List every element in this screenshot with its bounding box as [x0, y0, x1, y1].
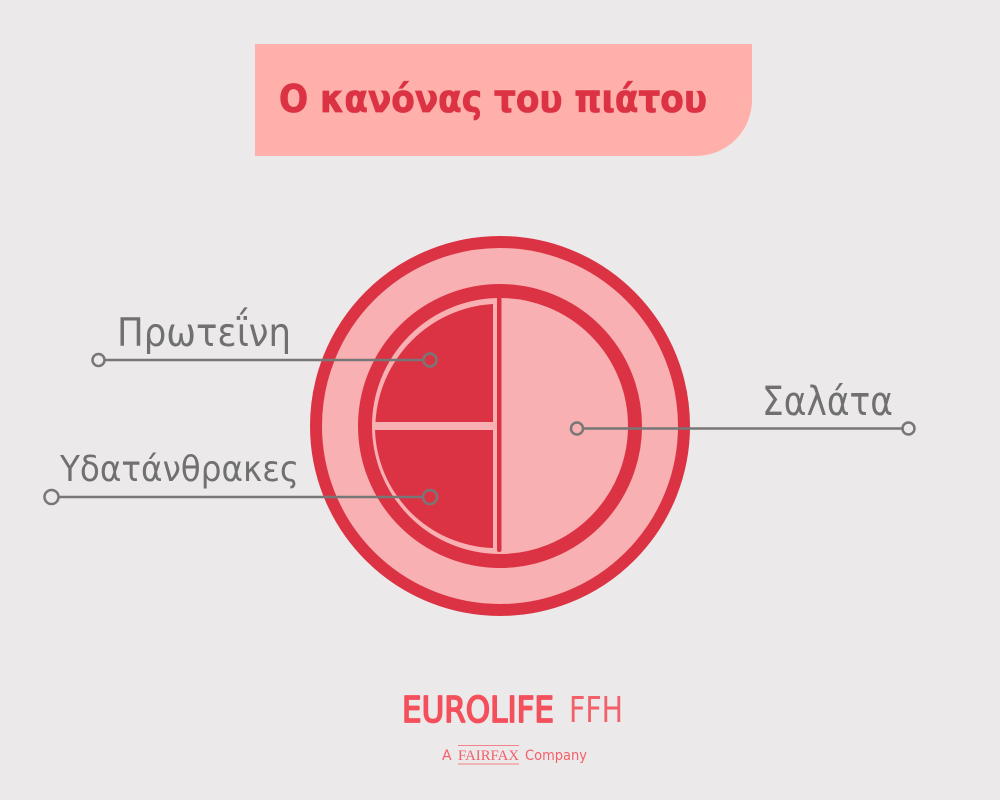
logo tagline: FAIRFAX — [458, 748, 519, 764]
logo — [402, 690, 623, 764]
logo: EUROLIFE — [402, 690, 554, 731]
plate diagram — [316, 242, 684, 610]
logo tagline: Company — [525, 748, 587, 764]
carbohydrates quarter — [375, 430, 493, 548]
logo: FFH — [569, 690, 623, 731]
label: protein — [92, 308, 436, 366]
protein quarter — [376, 304, 493, 422]
label: protein: Πρωτεΐνη — [117, 308, 291, 356]
outer plate rim — [316, 242, 684, 610]
label: salad: Σαλάτα — [762, 379, 893, 425]
logo tagline: A — [442, 748, 452, 764]
title: Ο κανόνας του πιάτου — [279, 77, 707, 121]
vertical divider — [497, 297, 502, 552]
logo tagline — [442, 746, 587, 764]
title banner — [255, 44, 752, 156]
label: carbohydrates: Υδατάνθρακες — [59, 449, 299, 490]
inner plate ring — [365, 291, 635, 561]
label: carbohydrates — [44, 449, 437, 504]
label: salad — [571, 379, 914, 434]
